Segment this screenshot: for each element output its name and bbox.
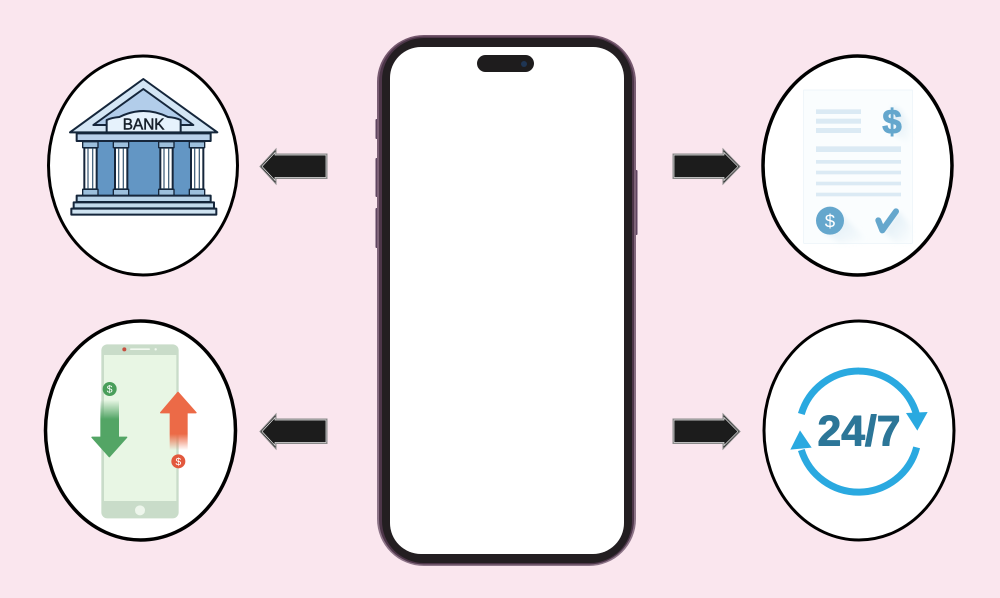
green dollar coin [103,382,117,396]
phone bezel [382,38,632,563]
dollar sign: $ [882,103,902,141]
sign plaque [107,111,181,132]
24/7 label: 24/7 [817,408,901,456]
icon: phone with transfer arrows: $ [107,385,113,396]
dynamic island [477,55,534,72]
arrow: to bill [673,149,740,184]
upload arrow [170,412,188,450]
soft shadows [823,213,867,243]
entablature [77,133,211,141]
wall [97,141,190,196]
dollar badge [816,207,844,235]
panel: transfers circle [46,321,236,540]
icon: phone with transfer arrows [92,344,196,518]
bank label: BANK [123,116,165,133]
columns [83,142,205,196]
red dollar coin [171,454,185,468]
phone inner rim [379,36,634,564]
phone side buttons [376,119,638,248]
icon: 24/7 cycle [790,371,928,492]
steps [77,196,211,202]
roof [70,79,217,132]
phone frame [377,35,636,566]
arrow: to transfers [260,414,327,449]
top arc arrow [801,371,928,431]
central smartphone [376,35,638,566]
icon: bank building [70,79,217,215]
bottom arc arrow [790,430,917,492]
phone screen [390,47,624,554]
mini phone [101,344,179,518]
paper [804,90,912,243]
arrow: to bank [260,149,327,184]
front camera [521,61,527,67]
panel: 24/7 circle [764,321,954,540]
icon: invoice document: $ [825,210,836,231]
arrow: to 24/7 [673,414,740,449]
text lines [816,109,901,196]
panel: bank circle [48,56,238,275]
icon: invoice document [804,90,912,243]
download arrow [100,400,119,438]
icon: phone with transfer arrows: $ [175,457,181,468]
check mark [878,211,896,230]
panel: bill circle [763,56,952,275]
